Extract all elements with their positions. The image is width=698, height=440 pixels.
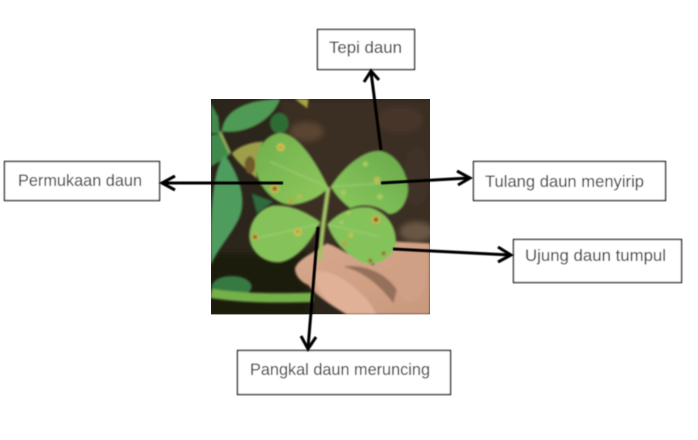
label box: Pangkal daun meruncing: [238, 350, 450, 394]
stem of leaf: [319, 187, 328, 260]
arrow: to Ujung daun tumpul: [393, 247, 511, 262]
label box: Ujung daun tumpul: [514, 240, 682, 282]
arrow: to Tulang daun menyirip: [381, 171, 470, 185]
photo: peanut leaf held in a hand: [207, 99, 433, 317]
leaflet upper left: [256, 133, 328, 205]
label box: Permukaan daun: [4, 162, 160, 200]
label box: Tepi daun: [318, 30, 414, 70]
arrow: to Tepi daun: [364, 71, 381, 150]
leaflet lower left: [249, 205, 320, 262]
leaflet lower right: [327, 207, 396, 264]
label box: Permukaan daun: Permukaan daun: [18, 172, 142, 190]
label box: Tepi daun: Tepi daun: [329, 39, 402, 57]
label box: Pangkal daun meruncing: Pangkal daun meruncing: [250, 361, 430, 379]
leaf spots: [251, 143, 386, 263]
leaflet upper right: [331, 151, 408, 214]
label box: Ujung daun tumpul: Ujung daun tumpul: [525, 247, 666, 265]
arrow: to Pangkal daun meruncing: [301, 227, 318, 349]
background leaves: [222, 99, 280, 132]
label box: Tulang daun menyirip: [474, 162, 666, 200]
soil: [280, 99, 433, 246]
arrow: to Permukaan daun: [162, 176, 283, 190]
hand: [295, 242, 430, 314]
label box: Tulang daun menyirip: Tulang daun menyirip: [485, 173, 644, 191]
leaf veins: [255, 162, 382, 238]
